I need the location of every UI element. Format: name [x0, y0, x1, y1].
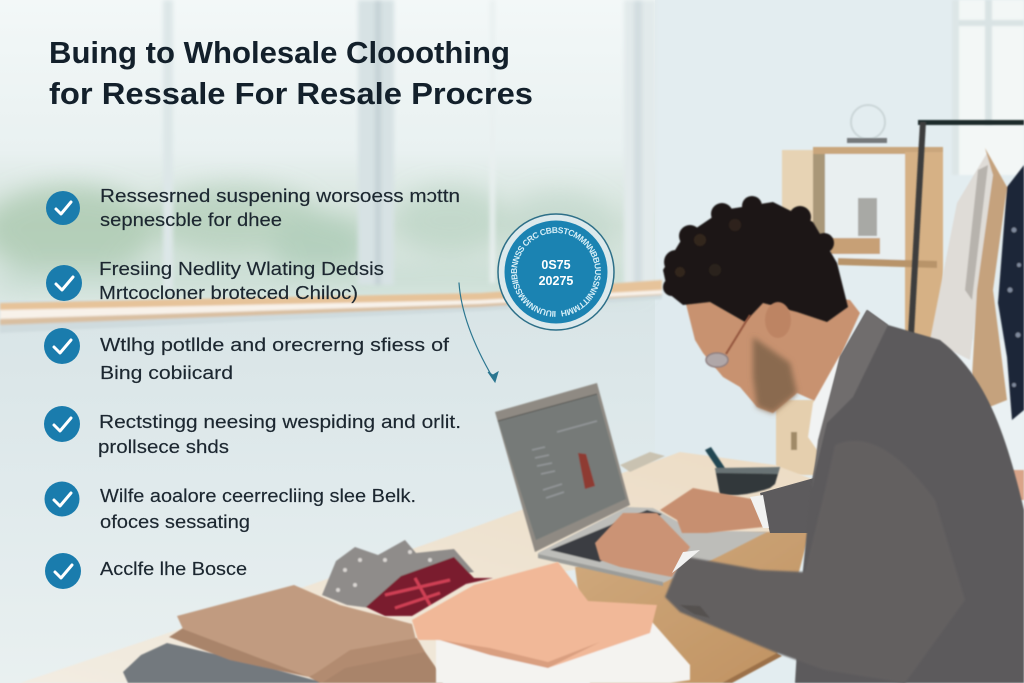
person: neck and face [685, 290, 860, 413]
clothing pile: knit and plaid [322, 540, 493, 616]
person: curly hair [663, 196, 848, 322]
arrow [459, 283, 498, 382]
background: large window with blurred trees [0, 0, 656, 300]
item 1 [46, 185, 460, 230]
checklist [44, 185, 461, 589]
item 6 [45, 553, 247, 589]
shelf unit [776, 105, 943, 475]
item 5: ofoces sessating [100, 511, 250, 532]
laptop [495, 383, 767, 586]
item 2: Mrtcocloner broteced Chiloc) [99, 282, 358, 303]
person: glasses [706, 315, 750, 367]
title: for Ressale For Resale Procres [49, 76, 533, 111]
item 3: Wtlhg potllde and orecrerng sfiess of [100, 334, 450, 355]
person: shirt [808, 355, 840, 450]
item 6: Acclfe lhe Bosce [100, 558, 247, 579]
pen holder cup [705, 447, 780, 495]
person: sleeve buttons [680, 605, 710, 618]
person [595, 196, 1024, 683]
item 3: Bing cobiicard [100, 362, 233, 383]
title [49, 35, 533, 111]
person: far hand [660, 488, 763, 533]
item 1: sepnescble for dhee [100, 209, 282, 230]
table [20, 452, 1024, 683]
item 2: Fresiing Nedlity Wlating Dedsis [99, 258, 384, 279]
seal badge: 0S75 [541, 258, 571, 272]
item 3 [44, 328, 450, 383]
seal badge: IIUUNNMMSSIIBBNNSS CRC CBBSTCMMNNBBUUSSNNIITTMMH [511, 227, 601, 317]
seal badge [497, 213, 615, 331]
item 4: prollsece shds [98, 436, 229, 457]
person: near hand [595, 513, 690, 577]
person: cuffs [672, 495, 769, 573]
title: Buing to Wholesale Clooothing [49, 35, 510, 70]
person: near arm sleeve [665, 441, 965, 683]
person: far arm sleeve [760, 478, 814, 533]
person: jacket body [795, 310, 1024, 683]
item 2 [46, 258, 384, 303]
person: lapel [812, 310, 888, 490]
item 5: Wilfe aoalore ceerrecliing slee Belk. [100, 485, 416, 506]
person: beard [753, 337, 797, 413]
person: ear [765, 302, 791, 338]
item 5 [44, 482, 416, 532]
clothing pile: peach and white [412, 562, 690, 683]
item 4: Rectstingg neesing wespiding and orlit. [99, 411, 461, 432]
seal badge: 20275 [539, 274, 573, 288]
clothing rack [908, 120, 1024, 420]
background: right window [945, 0, 1024, 683]
background: window sill [0, 280, 662, 333]
item 1: Ressesrned suspening worsoess mɔttn [100, 185, 460, 206]
item 4 [44, 406, 461, 457]
clothing pile: brown and grey [123, 585, 443, 683]
